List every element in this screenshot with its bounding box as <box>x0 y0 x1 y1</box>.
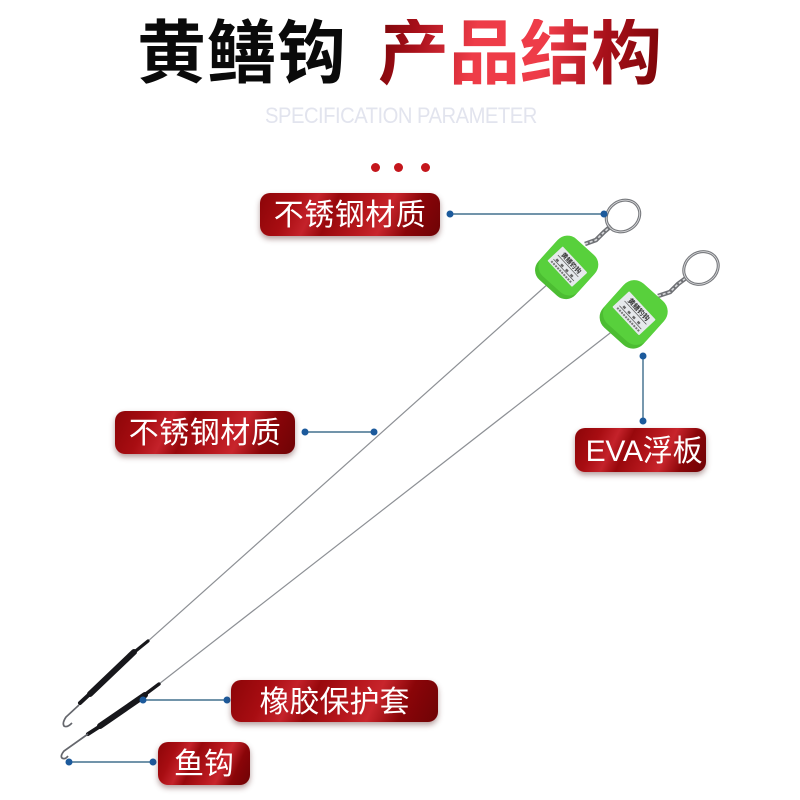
label: EVA float <box>575 428 706 472</box>
lower green float: 黄鳝钓钩 <box>626 296 652 323</box>
label: fish hook: 鱼钩 <box>174 748 234 781</box>
title: red gradient part: 产品结构 <box>378 15 662 94</box>
lower steel rod <box>159 330 614 684</box>
leader line: rubber sleeve <box>140 696 230 704</box>
upper rubber sleeve <box>80 641 148 703</box>
subtitle: SPECIFICATION PARAMETER <box>265 103 537 128</box>
label: stainless steel (rod): 不锈钢材质 <box>129 417 281 450</box>
upper key ring <box>600 194 646 238</box>
upper key chain <box>585 226 611 244</box>
upper steel rod <box>147 283 549 642</box>
label: stainless steel (rod) <box>115 411 295 454</box>
label: fish hook <box>158 742 250 785</box>
lower key ring <box>677 245 725 291</box>
lower fish hook <box>61 734 88 759</box>
upper fish hook <box>63 705 79 727</box>
leader line: key ring material <box>446 210 608 218</box>
label: rubber sleeve: 橡胶保护套 <box>260 686 410 718</box>
upper green float <box>526 227 607 308</box>
leader line: rod material <box>302 428 378 436</box>
label: EVA float: EVA浮板 <box>586 434 702 468</box>
lower rubber sleeve <box>88 684 159 734</box>
label: rubber sleeve <box>231 680 438 722</box>
eel hook: upper <box>63 194 646 727</box>
leader line: EVA float <box>640 352 646 424</box>
eel hook: lower <box>61 245 725 759</box>
label: stainless steel (ring): 不锈钢材质 <box>274 199 426 232</box>
leader line: fish hook <box>66 758 156 766</box>
lower key chain <box>658 278 686 296</box>
title: black part: 黄鳝钩 <box>137 15 347 92</box>
label: stainless steel (ring) <box>260 193 440 236</box>
decorative red dots <box>371 163 430 172</box>
upper green float: 黄鳝钓钩 <box>559 250 584 276</box>
lower green float <box>590 271 677 358</box>
